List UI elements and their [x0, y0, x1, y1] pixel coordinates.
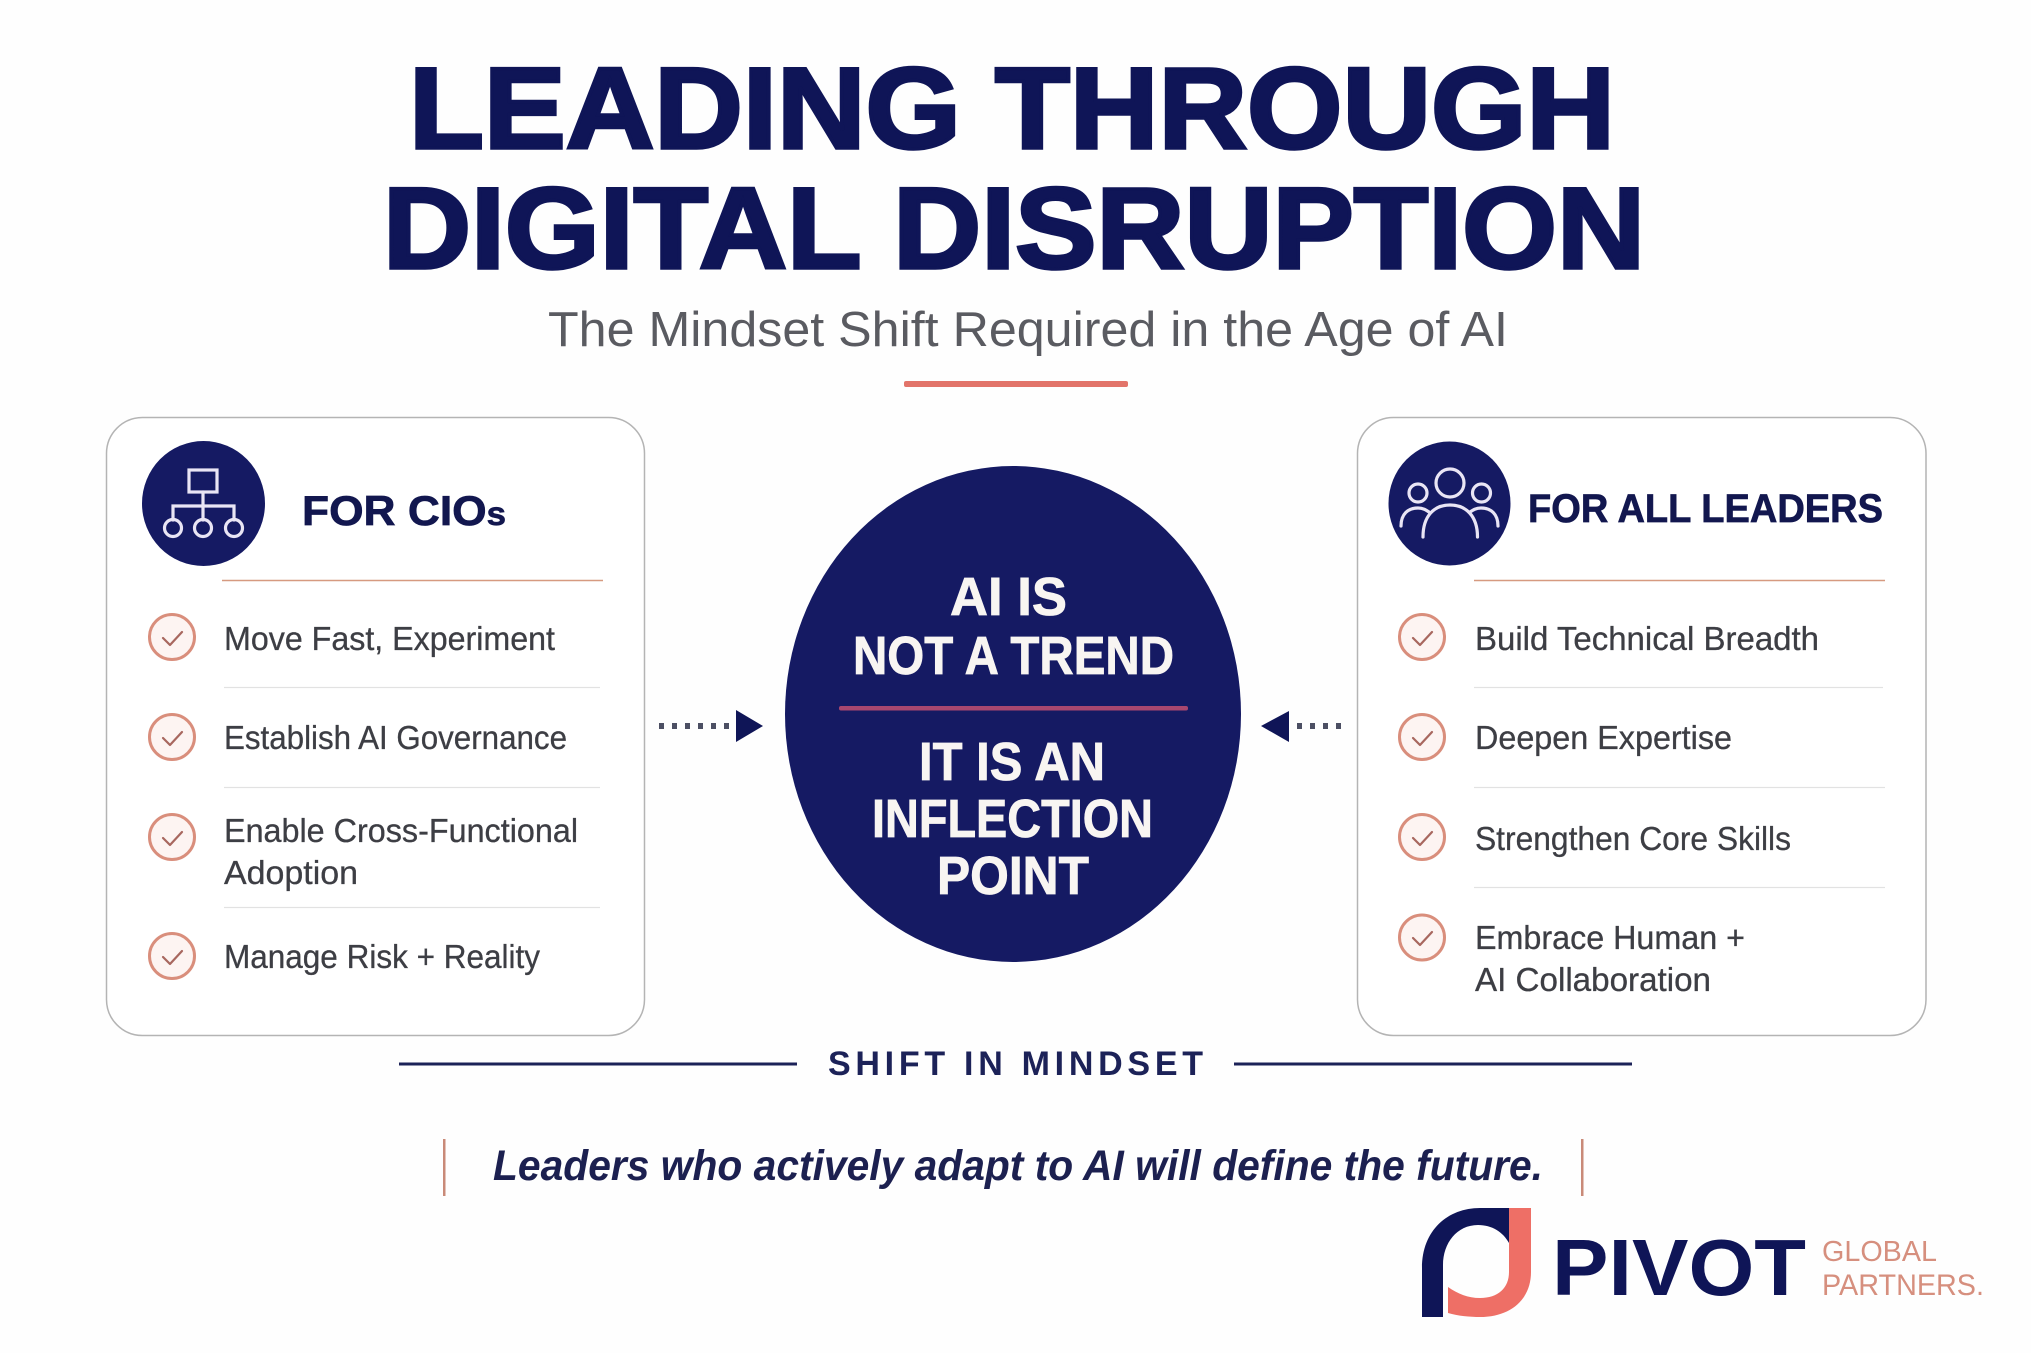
- item: technical breadth: Build Technical Breadth: [1475, 620, 1819, 657]
- subtitle: The Mindset Shift Required in the Age of AI: [548, 303, 1508, 357]
- title: [383, 45, 1645, 293]
- heading: for all leaders: FOR ALL LEADERS: [1528, 487, 1883, 531]
- center circle: IT IS AN: [919, 732, 1105, 792]
- item: human + AI: Embrace Human +: [1475, 919, 1745, 956]
- icon: org chart: [142, 441, 265, 566]
- center circle: NOT A TREND: [853, 626, 1174, 686]
- item: deepen expertise: [1400, 714, 1732, 760]
- closing quote: Leaders who actively adapt to AI will define the future.: [493, 1142, 1543, 1190]
- accent rule under subtitle: [904, 381, 1128, 387]
- logo: Pivot Global Partners: PARTNERS.: [1822, 1269, 1984, 1302]
- shift in mindset label: SHIFT IN MINDSET: [828, 1045, 1203, 1083]
- panel: for all leaders: [1358, 418, 1926, 1036]
- center circle: POINT: [937, 846, 1089, 906]
- item: deepen expertise: Deepen Expertise: [1475, 719, 1732, 756]
- item: move fast: Move Fast, Experiment: [224, 620, 555, 657]
- item: cross-functional: Adoption: [224, 854, 358, 891]
- item: technical breadth: [1400, 614, 1819, 660]
- item: core skills: Strengthen Core Skills: [1475, 820, 1791, 857]
- panel: for CIOs: [106, 418, 644, 1036]
- item: human + AI: [1400, 915, 1745, 998]
- item: cross-functional: Enable Cross-Functional: [224, 812, 578, 849]
- center circle: AI IS: [950, 567, 1067, 627]
- heading: for CIOs: FOR CIO s: [302, 487, 506, 534]
- arrow: right into center: [1261, 711, 1344, 742]
- center circle: INFLECTION: [872, 789, 1153, 849]
- item: cross-functional: [150, 812, 578, 891]
- logo: Pivot Global Partners: PIVOT: [1552, 1223, 1806, 1312]
- icon: people: [1388, 442, 1510, 566]
- logo: Pivot Global Partners: GLOBAL: [1822, 1236, 1937, 1268]
- logo: Pivot Global Partners: [1422, 1208, 1984, 1317]
- title: DIGITAL DISRUPTION: [383, 165, 1645, 293]
- item: manage risk: Manage Risk + Reality: [224, 938, 540, 975]
- title: LEADING THROUGH: [409, 45, 1615, 173]
- center circle: [785, 466, 1241, 962]
- item: governance: [150, 714, 567, 760]
- item: human + AI: AI Collaboration: [1475, 961, 1711, 998]
- item: governance: Establish AI Governance: [224, 719, 567, 756]
- item: manage risk: [150, 934, 540, 978]
- item: move fast: [150, 614, 555, 660]
- arrow: left into center: [659, 710, 763, 742]
- item: core skills: [1400, 814, 1791, 860]
